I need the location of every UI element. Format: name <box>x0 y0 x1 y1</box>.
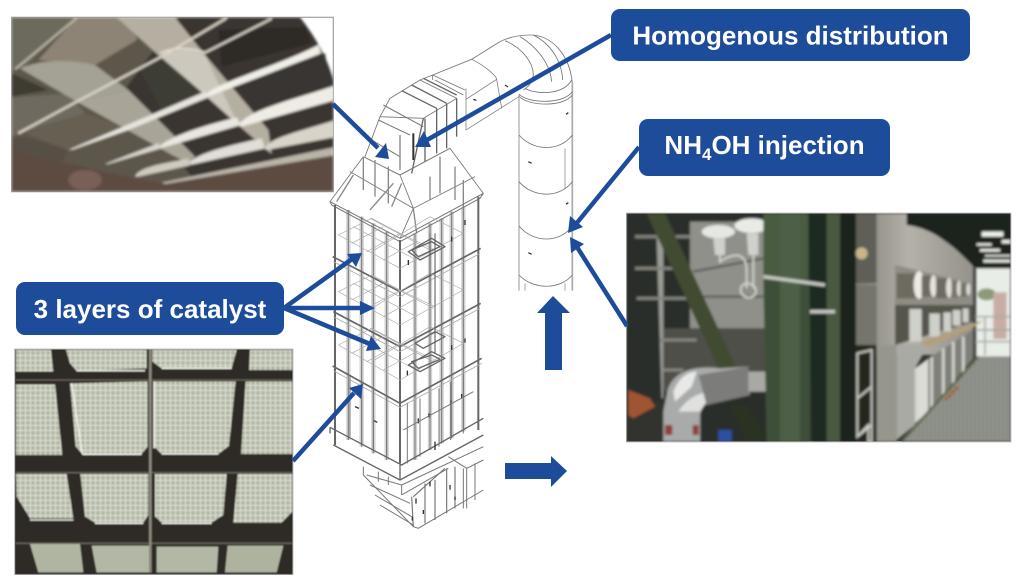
photo: flow distribution vanes <box>12 17 333 192</box>
duct elbow <box>420 35 572 130</box>
label: NH4OH injection <box>639 119 890 176</box>
arrow: outlet gas flow <box>505 456 567 487</box>
label: homogenous distribution: Homogenous distribution <box>632 20 949 50</box>
photo: ammonia injection skid <box>627 213 1011 442</box>
label: NH4OH injection: 4 <box>702 145 712 164</box>
label: 3 layers of catalyst <box>16 282 284 335</box>
arrow: catalyst photo to tower <box>293 384 363 461</box>
arrow: injection label to duct <box>568 147 639 233</box>
access hatches <box>407 220 465 423</box>
diagram: reactor tower and duct line drawing <box>330 35 572 528</box>
outlet hopper <box>363 447 483 528</box>
lower casing detail <box>350 373 473 463</box>
vertical gas duct <box>519 83 572 291</box>
label: NH4OH injection: OH injection <box>711 130 865 160</box>
transition hood <box>330 78 483 238</box>
arrow: vanes photo to hood <box>333 104 389 159</box>
arrow: distribution label to hood <box>415 35 611 147</box>
arrows: catalyst label to three layers <box>284 253 381 351</box>
photo: catalyst honeycomb grid <box>15 349 293 574</box>
label: homogenous distribution <box>611 9 970 61</box>
tower casing <box>330 193 483 480</box>
label: 3 layers of catalyst: 3 layers of catalyst <box>34 294 267 324</box>
arrow: upward gas flow <box>537 296 570 370</box>
label: NH4OH injection: NH <box>664 130 702 160</box>
catalyst layer grids <box>338 217 463 380</box>
arrow: injection photo to duct <box>570 237 627 326</box>
